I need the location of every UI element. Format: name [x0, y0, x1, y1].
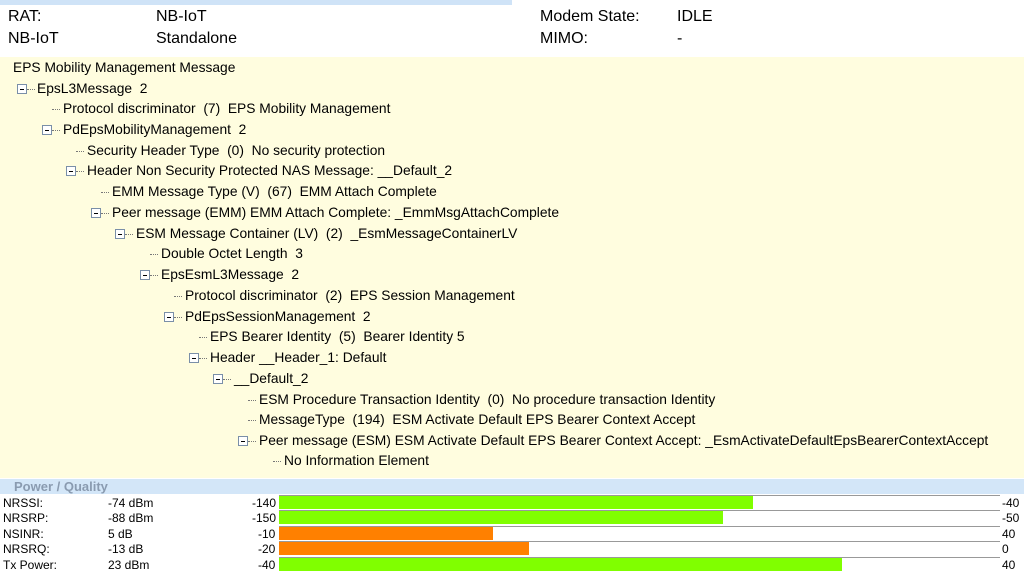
- panel: power quality meters: NRSRQ:: [3, 542, 50, 556]
- panel: message tree: EPS Bearer Identity (5) Bearer Identity 5: [210, 329, 465, 344]
- panel: message tree: Protocol discriminator (7) EPS Mobility Management: [63, 101, 390, 116]
- panel: message tree: Double Octet Length 3: [161, 246, 303, 261]
- panel: message tree: No Information Element: [284, 453, 429, 468]
- header info: -: [677, 30, 682, 47]
- header info: IDLE: [677, 8, 713, 25]
- panel: message tree: Security Header Type (0) No security protection: [87, 143, 385, 158]
- panel: power quality meters: 0: [1002, 542, 1009, 556]
- panel: power quality meters: 40: [1002, 558, 1015, 572]
- header info: MIMO:: [540, 30, 588, 47]
- panel: power quality meters: -10: [258, 527, 275, 541]
- panel: message tree: EpsL3Message 2: [37, 81, 147, 96]
- panel: message tree: ESM Procedure Transaction Identity (0) No procedure transaction Identity: [259, 392, 715, 407]
- panel: message tree: Peer message (EMM) EMM Attach Complete: _EmmMsgAttachComplete: [112, 205, 559, 220]
- panel: power quality meters: -40: [1002, 496, 1019, 510]
- panel: power quality meters: -40: [258, 558, 275, 572]
- header info: [8, 8, 713, 47]
- header info: NB-IoT: [8, 30, 59, 47]
- panel: message tree: EPS Mobility Management Message: [13, 60, 235, 75]
- panel: message tree: PdEpsMobilityManagement 2: [63, 122, 246, 137]
- panel: power quality meters: -13 dB: [108, 542, 143, 556]
- header info: NB-IoT: [156, 8, 207, 25]
- panel: message tree: [0, 57, 1024, 478]
- panel: power quality meters: [3, 495, 1019, 572]
- top strip: [0, 0, 512, 5]
- panel: message tree: Protocol discriminator (2) EPS Session Management: [185, 288, 515, 303]
- panel: power quality meters: NRSSI:: [3, 496, 43, 510]
- power quality heading: Power / Quality: [14, 479, 108, 494]
- panel: power quality meters: -74 dBm: [108, 496, 153, 510]
- panel: power quality meters: -150: [252, 511, 276, 525]
- panel: message tree: EpsEsmL3Message 2: [161, 267, 299, 282]
- panel: message tree: Header Non Security Protected NAS Message: __Default_2: [87, 163, 452, 178]
- panel: power quality meters: -88 dBm: [108, 511, 153, 525]
- panel: message tree: Header __Header_1: Default: [210, 350, 386, 365]
- panel: message tree: ESM Message Container (LV) (2) _EsmMessageContainerLV: [136, 226, 517, 241]
- header info: RAT:: [8, 8, 41, 25]
- panel: power quality meters: Tx Power:: [3, 558, 57, 572]
- panel: message tree: __Default_2: [234, 371, 308, 386]
- panel: power quality meters: -140: [252, 496, 276, 510]
- panel: power quality meters: -50: [1002, 511, 1019, 525]
- panel: message tree: MessageType (194) ESM Activate Default EPS Bearer Context Accept: [259, 412, 695, 427]
- panel: power quality meters: -20: [258, 542, 275, 556]
- panel: power quality meters: 40: [1002, 527, 1015, 541]
- header info: Standalone: [156, 30, 237, 47]
- panel: power quality meters: NSINR:: [3, 527, 44, 541]
- panel: power quality meters: 5 dB: [108, 527, 133, 541]
- panel: power quality meters: NRSRP:: [3, 511, 48, 525]
- header info: Modem State:: [540, 8, 640, 25]
- panel: power quality meters: 23 dBm: [108, 558, 149, 572]
- power quality heading: [0, 479, 1024, 494]
- panel: message tree: PdEpsSessionManagement 2: [185, 309, 371, 324]
- panel: message tree: EMM Message Type (V) (67) EMM Attach Complete: [112, 184, 437, 199]
- panel: message tree: Peer message (ESM) ESM Activate Default EPS Bearer Context Accept: _EsmActivateDefaultEpsBearerContextAccept: [259, 433, 988, 448]
